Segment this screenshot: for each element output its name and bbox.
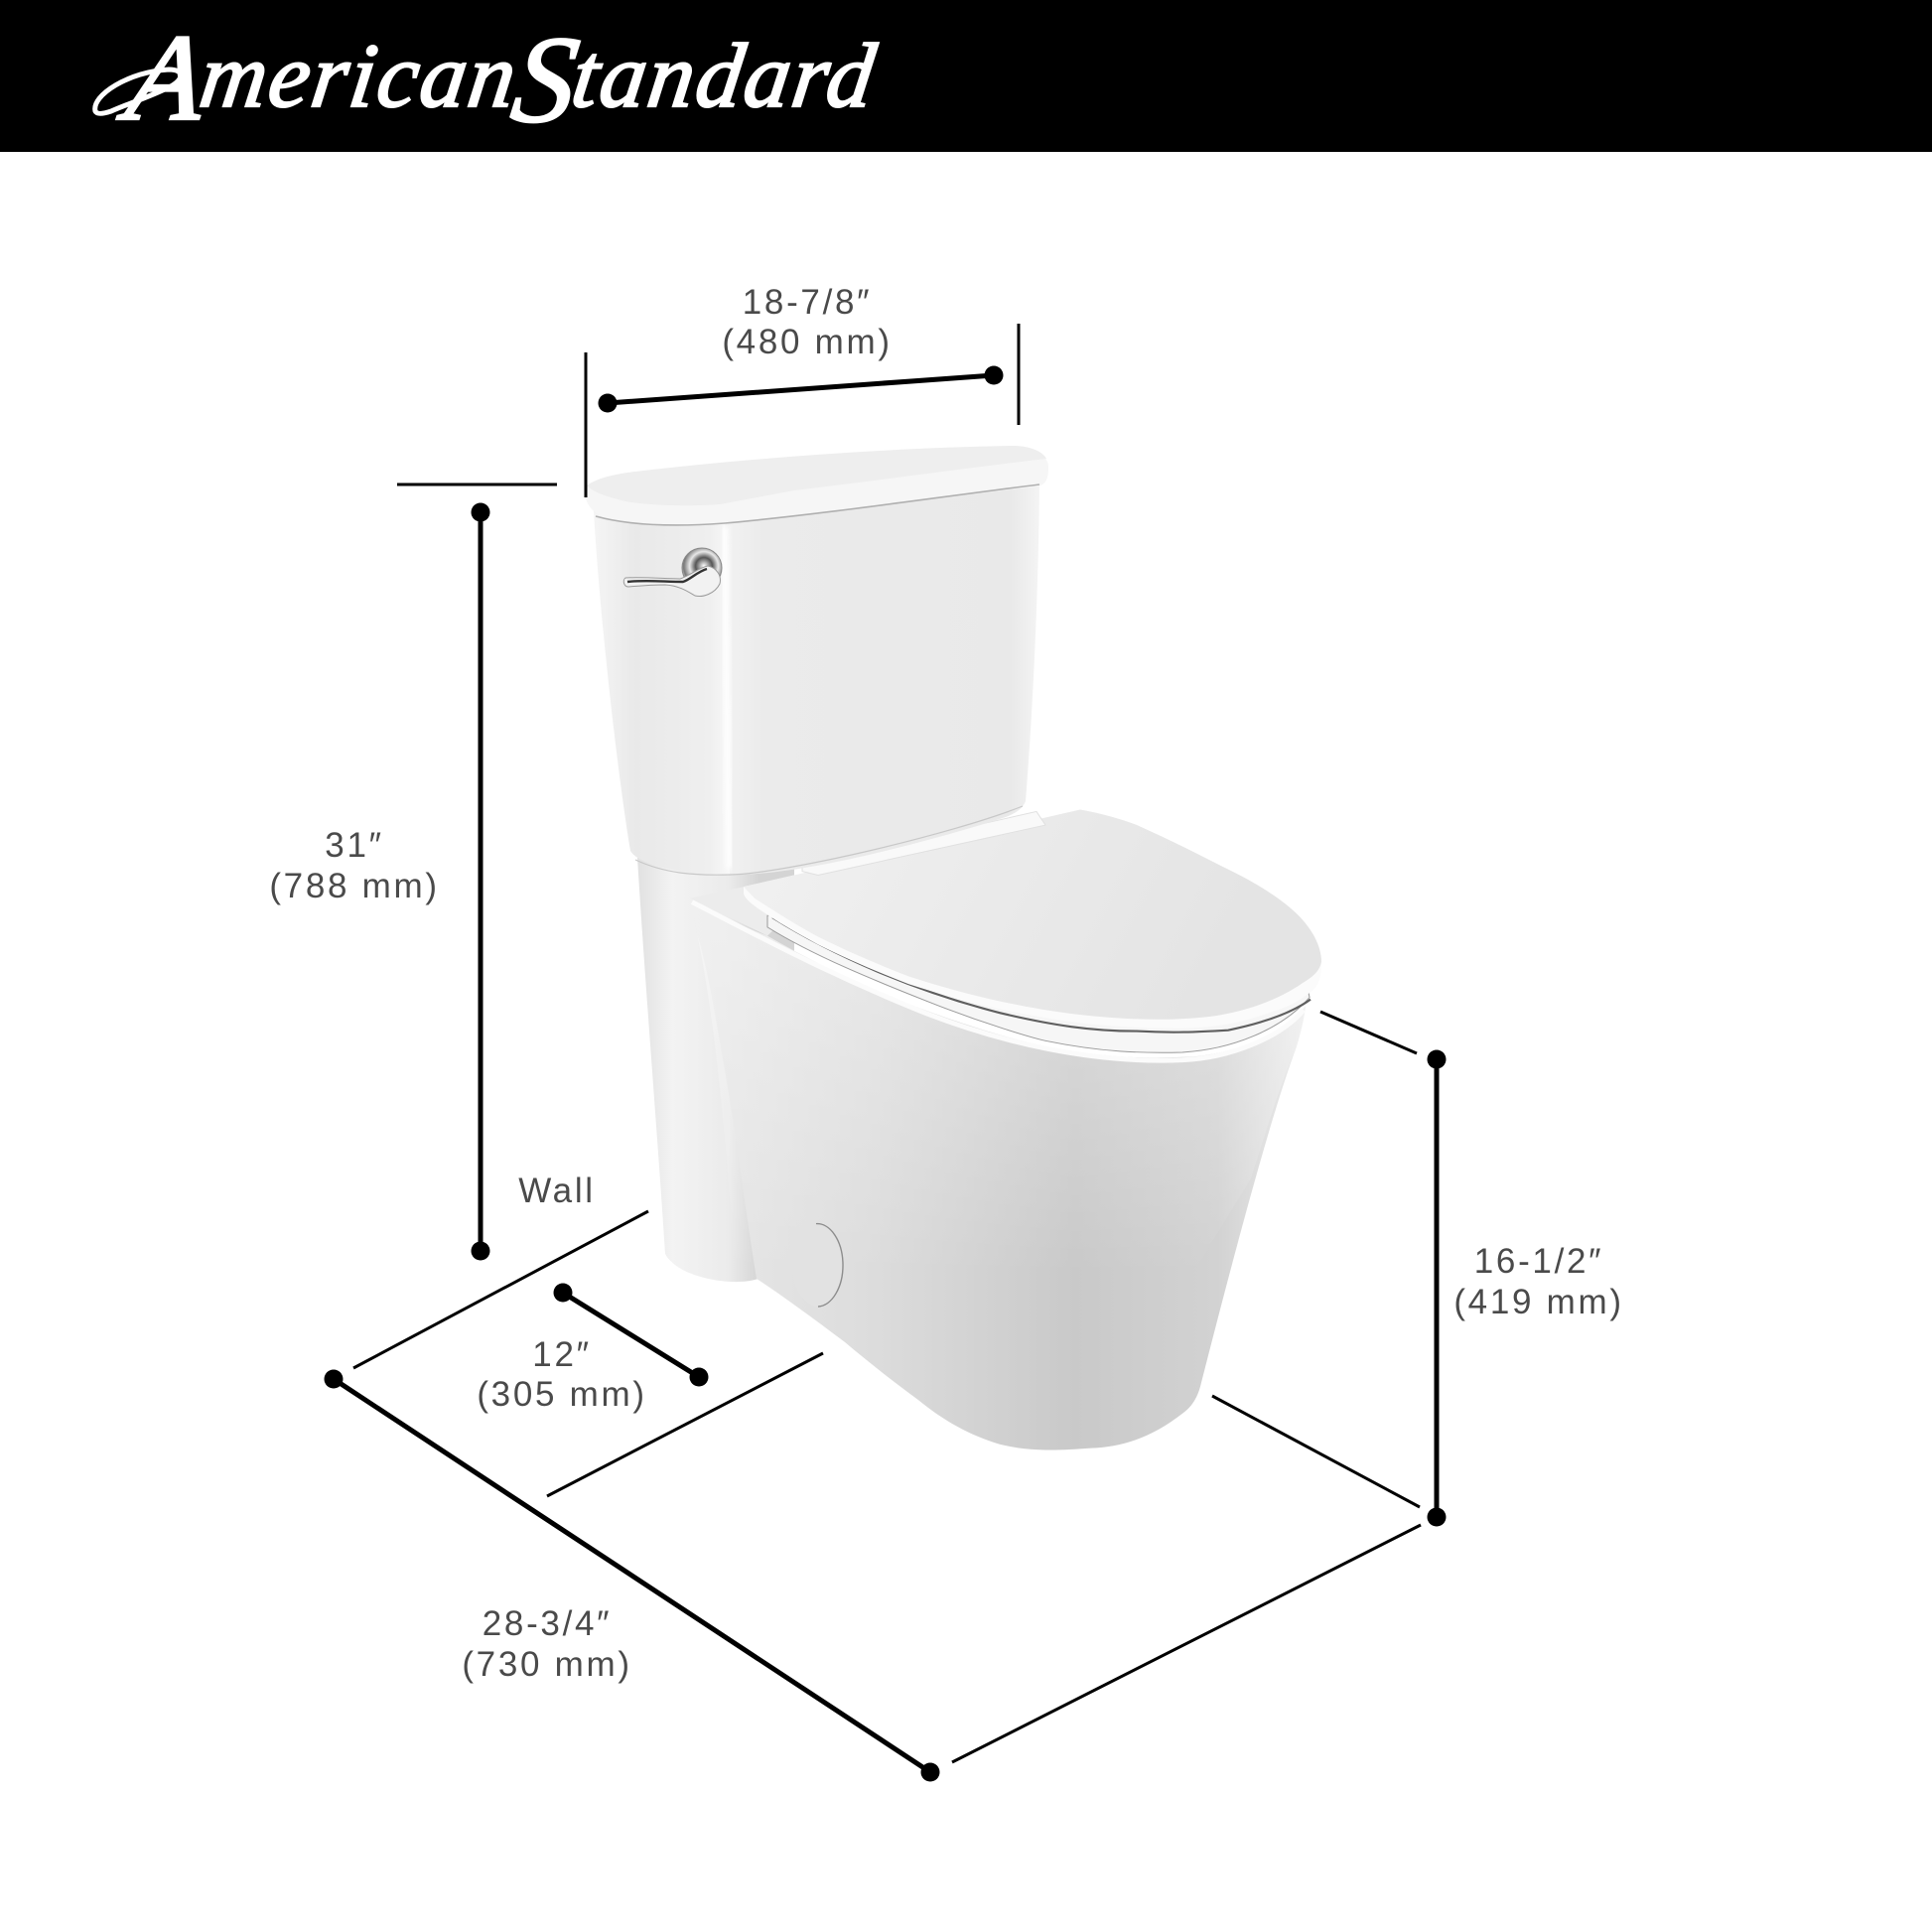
- tank front face: [725, 483, 1039, 875]
- dimension: tank width 18-7/8 in: [586, 283, 1019, 497]
- label: 28-3/4 in: 28-3/4″: [483, 1604, 612, 1643]
- pedestal: [637, 852, 794, 1282]
- tank lower shadow line: [635, 806, 1023, 875]
- label: 730 mm: (730 mm): [462, 1645, 632, 1684]
- side access cap: [792, 1224, 844, 1307]
- dimension: seat height 16-1/2 in: [1212, 1012, 1624, 1527]
- label: 12 in: 12″: [532, 1335, 592, 1374]
- header band: [0, 0, 1932, 152]
- logo: American Standard wordmark: merican: [195, 25, 524, 126]
- dimension: total height 31 in: [269, 484, 557, 1261]
- label: 18-7/8 in: 18-7/8″: [743, 283, 872, 322]
- wall reference line: [353, 1211, 648, 1368]
- dimension: depth 28-3/4 in: [324, 1370, 1421, 1781]
- label: 16-1/2 in: 16-1/2″: [1474, 1242, 1603, 1281]
- back of bowl top: [690, 887, 784, 936]
- dimension: rough-in 12 in: [477, 1283, 823, 1496]
- bowl rim highlight: [692, 902, 1304, 1060]
- label: 31 in: 31″: [325, 826, 384, 865]
- label: 788 mm: (788 mm): [269, 867, 440, 905]
- logo: American Standard wordmark: A: [112, 10, 216, 147]
- label: 305 mm: (305 mm): [477, 1375, 647, 1414]
- logo: American Standard wordmark: tandard: [566, 25, 883, 126]
- corner highlight: [725, 526, 730, 869]
- toilet seat: [767, 909, 1310, 1052]
- lid of tank: [585, 447, 1048, 524]
- seat shadow line: [772, 917, 1311, 1033]
- label: wall: Wall: [518, 1172, 596, 1210]
- label: 419 mm: (419 mm): [1453, 1283, 1624, 1321]
- flush lever: [623, 548, 722, 596]
- bowl: [690, 887, 1306, 1449]
- tank: [585, 446, 1048, 875]
- tank left face: [594, 511, 730, 875]
- toilet illustration: [585, 446, 1321, 1449]
- logo: American Standard wordmark: S: [504, 12, 589, 149]
- label: 480 mm: (480 mm): [722, 323, 893, 361]
- lid hinge bar: [802, 811, 1045, 875]
- seat lid: [744, 810, 1321, 1029]
- logo: American Standard wordmark: [95, 10, 886, 149]
